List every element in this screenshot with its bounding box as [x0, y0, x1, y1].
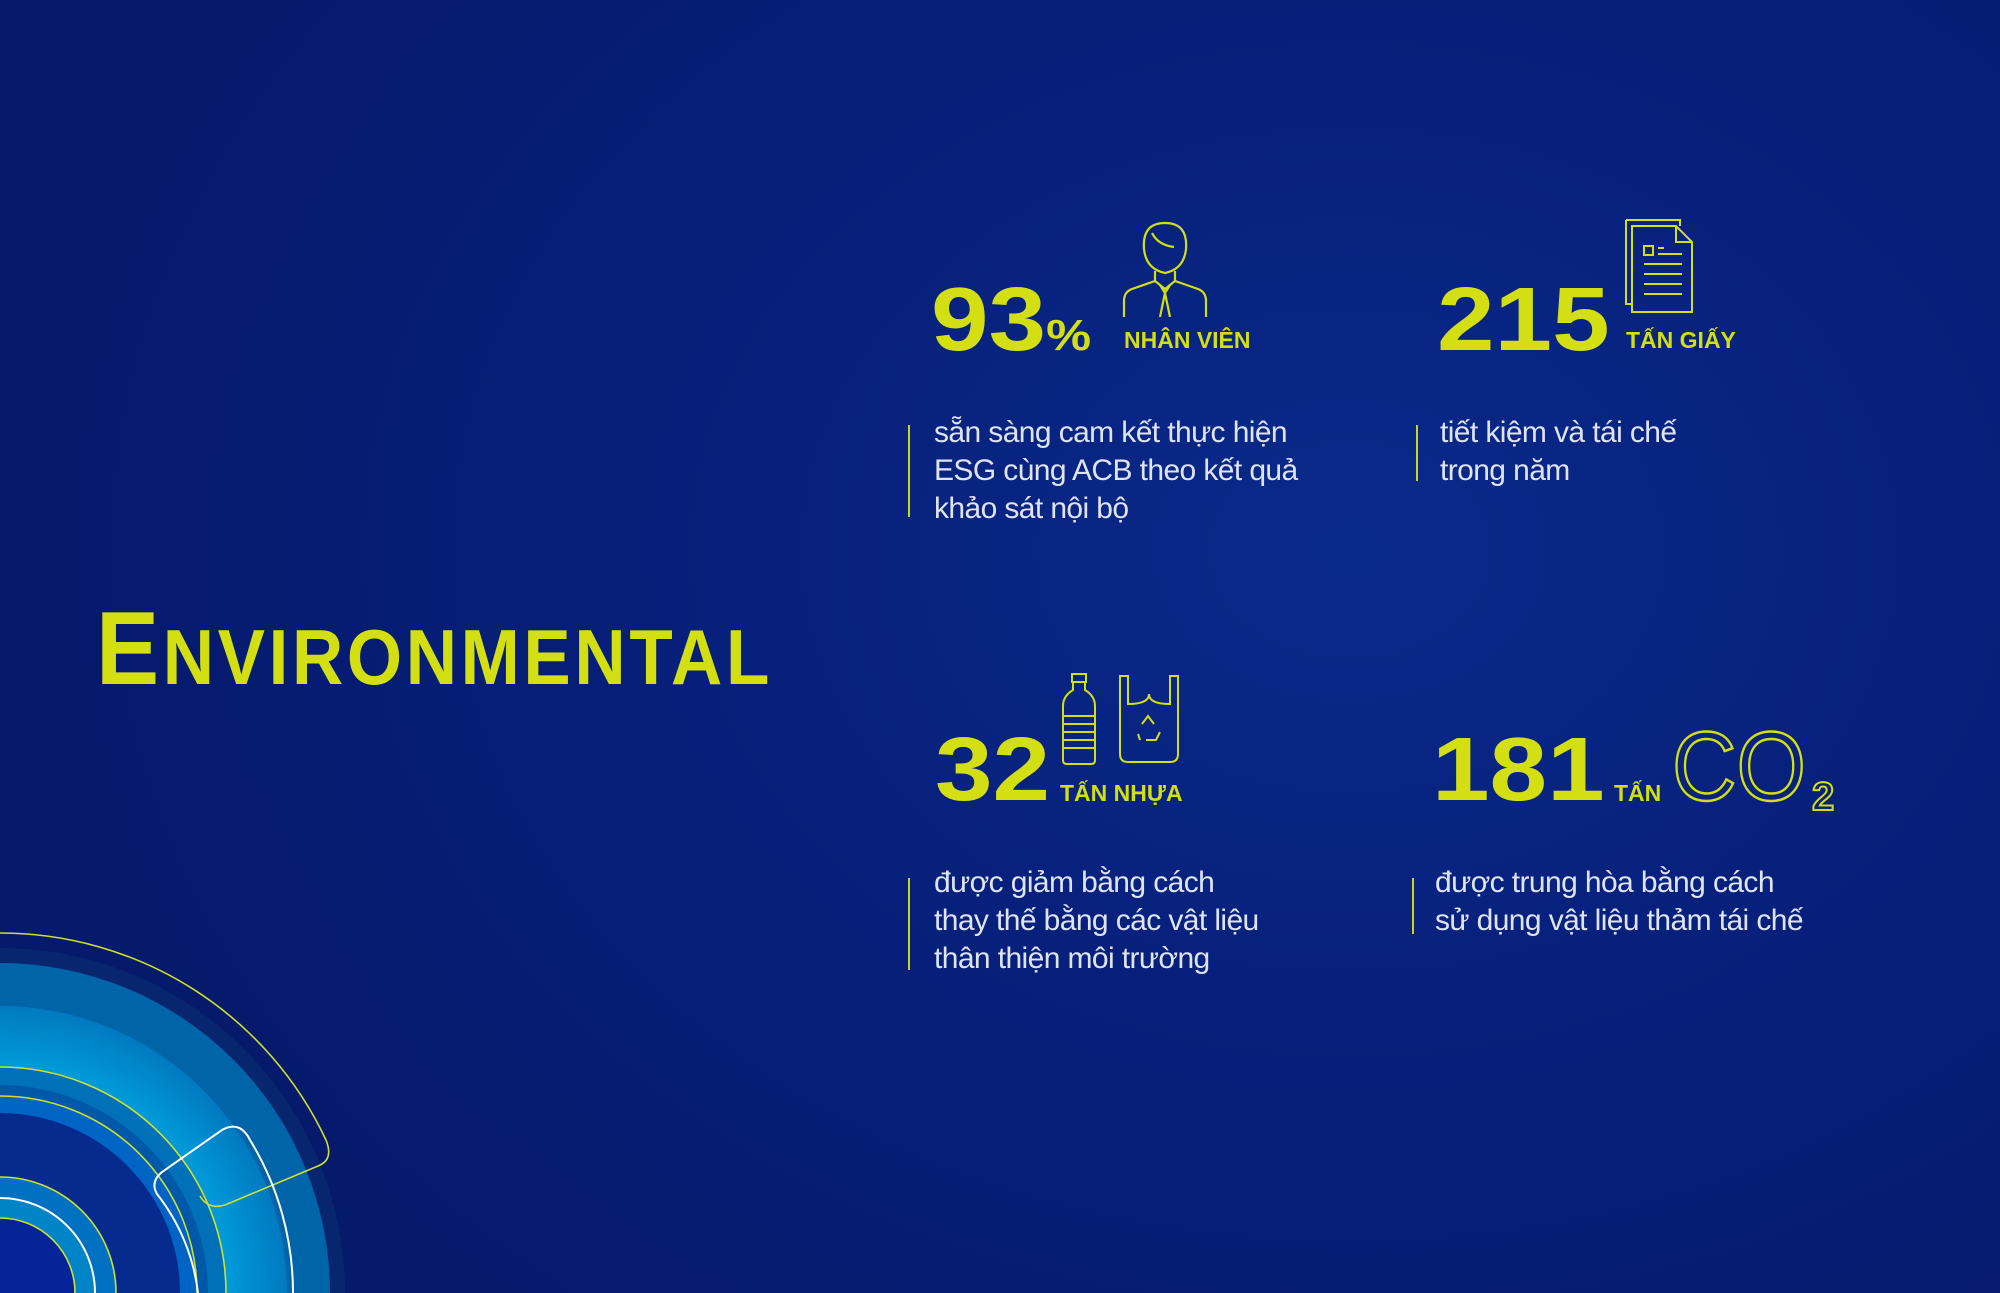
icon: person	[1122, 222, 1208, 317]
description 2: trong năm	[1440, 454, 1570, 487]
description 1: khảo sát nội bộ	[934, 492, 1128, 525]
description 1: sẵn sàng cam kết thực hiện	[934, 416, 1287, 449]
description 4: được trung hòa bằng cách	[1435, 866, 1774, 899]
description 1: ESG cùng ACB theo kết quả	[934, 454, 1298, 487]
stat: 215 tons paper	[1437, 219, 1736, 370]
description 3: thay thế bằng các vật liệu	[934, 904, 1259, 937]
label TẤN NHỰA: TẤN NHỰA	[1060, 780, 1183, 806]
number 32: 32	[935, 720, 1050, 820]
label TẤN GIẤY: TẤN GIẤY	[1626, 327, 1736, 353]
description 3: thân thiện môi trường	[934, 942, 1210, 975]
decoration: concentric arcs bottom-left	[0, 932, 345, 1293]
stat: 181 tons CO2	[1432, 716, 1834, 820]
description 1	[908, 416, 1298, 525]
stat: 32 tons plastic	[935, 673, 1183, 820]
description 4	[1412, 866, 1804, 937]
description 4: sử dụng vật liệu thảm tái chế	[1435, 904, 1803, 937]
description 2	[1416, 416, 1677, 487]
icon: bottle	[1062, 673, 1096, 765]
label TẤN: TẤN	[1614, 780, 1661, 806]
number 181: 181	[1432, 720, 1605, 820]
number 215: 215	[1437, 270, 1610, 370]
icon: recycle bag	[1119, 675, 1179, 763]
stat: 93% employees	[931, 222, 1251, 370]
label NHÂN VIÊN: NHÂN VIÊN	[1124, 327, 1251, 353]
icon: paper document	[1625, 219, 1693, 313]
number 93%: 93%	[931, 270, 1091, 370]
title: ENVIRONMENTAL	[96, 591, 773, 707]
description 3	[908, 866, 1259, 975]
description 2: tiết kiệm và tái chế	[1440, 416, 1676, 449]
description 3: được giảm bằng cách	[934, 866, 1214, 899]
